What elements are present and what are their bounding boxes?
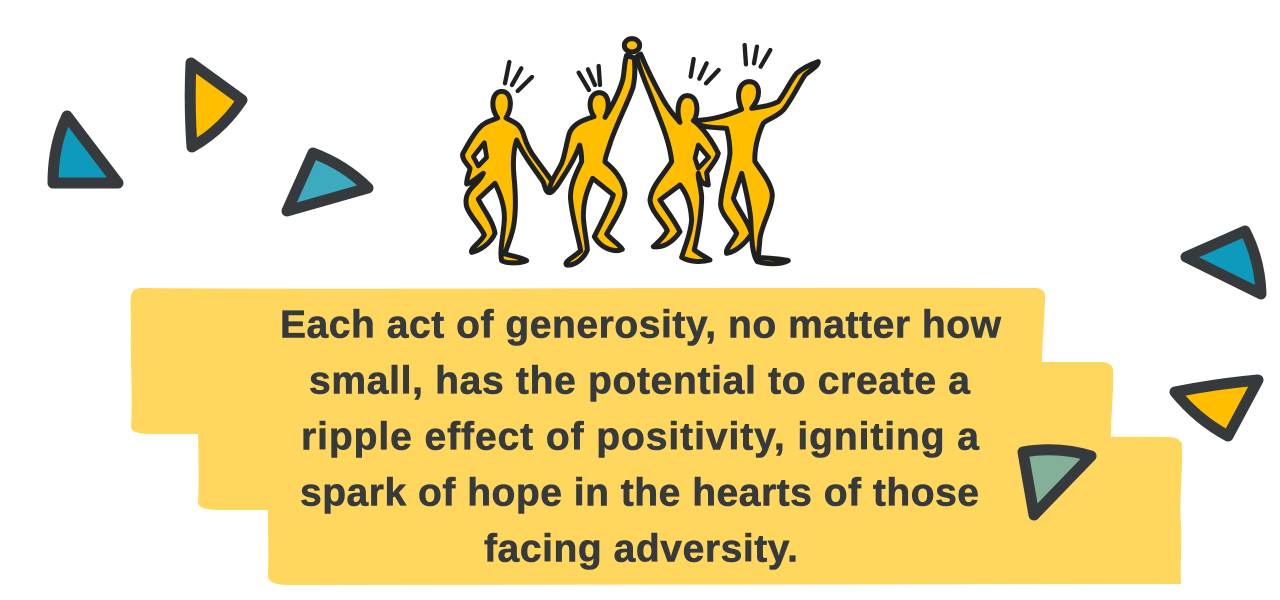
icon: blue triangle, right — [1186, 231, 1261, 294]
icon: yellow triangle, right — [1175, 380, 1258, 436]
excitement marks — [505, 45, 770, 91]
panel: yellow brush background — [131, 288, 1182, 585]
icon: green triangle on panel — [1023, 450, 1091, 515]
icon: teal triangle, left — [287, 153, 368, 211]
quote text: facing adversity. — [484, 528, 798, 570]
quote text: Each act of generosity, no matter how — [280, 304, 1002, 346]
icon: yellow triangle, top left — [190, 63, 242, 147]
figure: third person — [637, 54, 718, 261]
figure: first person — [463, 91, 553, 263]
quote text: spark of hope in the hearts of those — [300, 472, 979, 514]
quote text: ripple effect of positivity, igniting a — [301, 416, 979, 458]
icon: blue triangle, far left — [53, 116, 118, 183]
quote text: small, has the potential to create a — [309, 360, 970, 402]
figure: fourth person — [693, 62, 818, 264]
ball of joined hands — [624, 39, 640, 52]
figure: second person — [549, 39, 640, 265]
illustration: four people celebrating — [463, 39, 818, 265]
quote text — [280, 304, 1002, 570]
